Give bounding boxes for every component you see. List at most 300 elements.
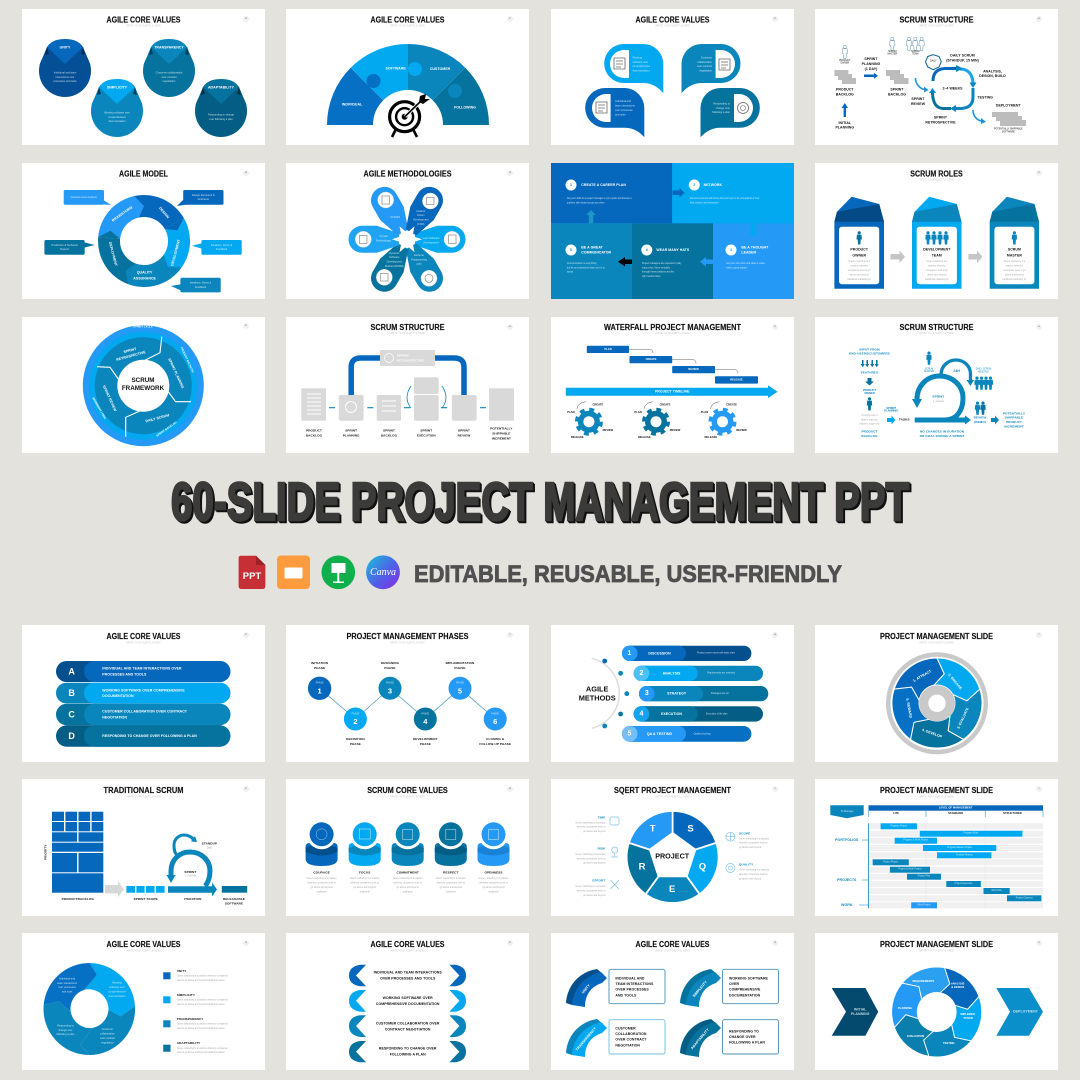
icon: gear cycle 1: REVIEW	[603, 428, 614, 432]
chart: four value drops: interactions over	[55, 75, 75, 79]
chart: four value drops: Individual and team	[54, 70, 76, 74]
diagram: product backlog column: Prioritized list of	[861, 414, 878, 417]
list: bracketed value rows: CONTRACT NEGOTIATION	[385, 1027, 431, 1031]
icon: canva: Canva	[370, 567, 396, 578]
diagram: box details and arrows: PLANNING	[343, 434, 360, 438]
list: A to D stacked pills: RESPONDING TO CHANGE OVER FOLLOWING A PLAN	[102, 734, 197, 738]
labels: SQERT letters and center: R	[639, 862, 646, 872]
labels: cycle stages: TATION	[963, 1016, 973, 1020]
value: courage	[306, 819, 338, 893]
chart: five-stage wheel: DEPLOYMENT	[108, 241, 118, 267]
value: commitment: COMMITMENT	[397, 871, 419, 875]
title: SCRUM STRUCTURE	[370, 322, 445, 332]
arrow: initial planning: INITIAL	[854, 1008, 867, 1012]
chart: four-part donut: following a plan	[56, 1032, 75, 1036]
value: commitment	[392, 819, 424, 893]
panel: project management wheel	[815, 625, 1058, 762]
block: be a thought leader: BE A THOUGHT	[741, 246, 769, 250]
item: unity: OVER PROCESSES	[615, 988, 649, 992]
block: be a great communicator: speak	[567, 272, 574, 274]
tag: to manage	[830, 805, 864, 818]
card: product owner: traditional marketing by	[847, 278, 872, 281]
diagram: product backlog column: END-USERS/CUSTOMERS	[849, 352, 890, 356]
diagram: product backlog column: INPUT FROM	[859, 347, 880, 351]
chart: four value drops: comprehensive	[108, 115, 126, 119]
value: respect: whereby companies seek to	[437, 881, 466, 884]
labels: cycle stages: RETROSPECTIVE	[925, 120, 956, 124]
diagram: box details and arrows: RETROSPECTIVE	[397, 358, 424, 362]
notes: time, risk, effort: whereby companies seek to	[577, 826, 606, 829]
diagram: box details and arrows: PRODUCT	[306, 429, 322, 433]
diagram: box details and arrows: SPRINT	[383, 429, 395, 433]
diagram: box details and arrows: POTENTIALLY	[490, 426, 513, 430]
card: scrum master: practice whereby	[1006, 264, 1024, 268]
list: bracketed value rows: FOLLOWING A PLAN	[390, 1053, 426, 1057]
card: product owner: companies seek to go	[848, 269, 871, 272]
panel: sqert project management: 8	[774, 788, 776, 790]
item: unity	[566, 969, 665, 1007]
callouts: wheel stage notes	[44, 190, 242, 292]
chart: six phase zigzag: IMPLEMENTATION	[446, 661, 475, 665]
panel: agile model: 43	[245, 172, 248, 174]
card: development team	[912, 197, 962, 289]
diagram: box details and arrows: EXECUTION	[417, 434, 436, 438]
panel: traditional scrum: WRITE YOUR SUBTITLE HERE	[126, 796, 161, 798]
legend: four core values: seek to go above and beyond traditional values.	[177, 1027, 226, 1030]
panel: agile core values curved arrows: 28	[774, 942, 777, 944]
title: PROJECT MANAGEMENT SLIDE	[880, 939, 993, 949]
card: scrum master: Green marketing is a	[1004, 260, 1026, 263]
item: adaptability: CHANGE OVER	[729, 1035, 756, 1039]
chart: six-petal flower: Lean Software	[423, 236, 440, 240]
diagram: scrum people and outcome: OR GOAL DURING A SPRINT	[920, 434, 964, 438]
item: transparency: COLLABORATION	[615, 1032, 647, 1036]
list: A to D stacked pills	[56, 661, 230, 747]
labels: cycle stages: PLANNING	[898, 1006, 912, 1010]
chart: gantt rows: Project Execution	[955, 882, 973, 885]
card: development team: companies seek to go	[926, 269, 949, 272]
chart: four value drops	[39, 39, 247, 137]
list: bracketed value rows: COMPREHENSIVE DOCUMENTATION	[376, 1002, 440, 1006]
list: A to D stacked pills: CUSTOMER COLLABORATION OVER CONTRACT	[102, 710, 188, 714]
bubble: individual and team	[585, 88, 644, 137]
list: five method pills: STRATEGY	[667, 692, 687, 696]
chart: waterfall steps	[587, 346, 758, 384]
labels: portfolio levels: PROJECTS	[837, 878, 857, 882]
value: focus: whereby companies seek to	[350, 881, 380, 884]
chart: five-stage wheel: QUALITY	[137, 271, 153, 275]
value: focus: traditional	[360, 890, 370, 893]
icon: gear cycle 2: REVIEW	[670, 428, 681, 432]
item: simplicity	[680, 969, 778, 1007]
diagram: backlog stacks and labels: PRODUCT	[836, 87, 854, 91]
diagram: sprint spiral: 1–4 weeks	[933, 401, 945, 403]
title: AGILE CORE VALUES	[636, 14, 710, 24]
diagram: product backlog column: PLANNING	[884, 408, 898, 412]
bubble: working software: documentation	[632, 68, 650, 72]
block: be a great communicator: COMMUNICATOR	[581, 250, 612, 254]
notes: scope, quality: whereby companies seek to	[739, 873, 768, 876]
diagram: scrum people and outcome: NO CHANGES IN DURATION	[920, 430, 965, 434]
list: bracketed value rows: OVER PROCESSES AND TOOLS	[380, 976, 436, 980]
chart: gantt rows: Work Project	[917, 903, 931, 906]
bubble: individual and team: team interactions	[615, 104, 635, 108]
chart: gantt rows: Program Work	[964, 832, 979, 835]
panel: waterfall project management: WRITE YOUR SUBTITLE HERE	[655, 332, 690, 335]
notes: scope, quality: whereby companies seek to	[739, 842, 768, 845]
list: five method pills	[622, 646, 768, 742]
diagram: sprint flow: RELEASABLE	[223, 897, 245, 901]
chart: concentric framework wheel: INCREMENT / PBIS	[91, 396, 107, 420]
labels: portfolio levels: PORTFOLIOS	[835, 838, 859, 842]
block: wear many hats: Project managers are expected to play	[642, 262, 682, 265]
title: SQERT PROJECT MANAGEMENT	[614, 785, 732, 795]
legend: four core values: TRANSPARENCY	[177, 1017, 204, 1021]
labels: cycle stages: REQUIREMENTS	[912, 979, 934, 983]
bubble: customer collaboration	[682, 44, 740, 93]
legend: four core values: Green marketing is a practice whereby companies	[177, 999, 229, 1002]
chart: gantt rows: Program & Work Project	[903, 839, 929, 842]
labels: cycle stages: ANALYSIS,	[983, 69, 1002, 73]
panel: project management gantt: 5	[1038, 788, 1040, 790]
block: create a career plan: 1	[570, 183, 572, 187]
diagram: backlog stacks and labels: PLANNING	[835, 126, 854, 130]
panel: agile core values rows: 21	[245, 634, 248, 636]
chart: six phase zigzag: 1	[318, 686, 322, 696]
value: commitment: Green marketing is a practice	[393, 877, 423, 880]
label: priority axis: PRIORITY	[44, 844, 48, 860]
block: be a great communicator: 5	[570, 248, 572, 252]
diagram: box details and arrows: INCREMENT	[492, 436, 511, 440]
chart: five-step cycle wheel	[886, 652, 988, 754]
chart: six-petal flower: (XP)	[416, 262, 422, 266]
panel: agile core values speech bubbles: 31	[774, 18, 777, 20]
card: development team: traditional marketing by	[925, 278, 950, 281]
diagram: scrum people and outcome: INCREMENT	[1004, 424, 1024, 428]
item: adaptability	[680, 1019, 778, 1057]
icon: powerpoint file: PPT	[243, 571, 261, 582]
diagram: backlog stacks and labels: REVIEW	[911, 102, 926, 106]
chart: four-part donut: Working	[112, 980, 122, 984]
value: courage: COURAGE	[313, 871, 330, 875]
value: commitment: whereby companies seek to	[393, 881, 423, 884]
chart: concentric framework wheel: SPRINT REVIEW	[102, 385, 118, 413]
diagram: backlog stacks and labels: INITIAL	[838, 121, 852, 125]
value: courage: go above and beyond	[311, 887, 333, 889]
value: courage: whereby companies seek to	[307, 881, 337, 884]
icon: gear cycle 1: PLAN	[567, 410, 575, 414]
item: simplicity: WORKING SOFTWARE	[729, 976, 769, 980]
bubble: working software	[604, 44, 663, 93]
legend: four core values: SIMPLICITY	[177, 993, 196, 997]
diagram: product backlog column: features, bugs to fix	[859, 423, 880, 426]
diagram: sprint spiral: 24H	[953, 369, 960, 373]
legend: four core values	[163, 969, 229, 1054]
chart: six-petal flower: Development	[423, 240, 439, 244]
title: AGILE CORE VALUES	[370, 14, 445, 24]
labels: cycle stages: DAILY	[930, 60, 937, 63]
diagram: scrum people and outcome: MASTER	[924, 370, 934, 373]
diagram: backlog stacks and labels: SPRINT	[890, 87, 904, 91]
notes: time, risk, effort: go above and beyond	[583, 895, 606, 897]
arrow: initial planning	[832, 988, 878, 1036]
diagram: backlog stacks and labels: SPRINT	[864, 57, 878, 61]
notes: time, risk, effort: EFFORT	[592, 879, 605, 883]
icon: gear cycle 2	[634, 402, 681, 439]
block: be a great communicator: Communication is everything	[567, 262, 597, 265]
diagram: sprint flow	[62, 835, 247, 906]
icon: keynote	[322, 556, 355, 589]
chart: gantt rows	[868, 823, 1043, 908]
value: focus: go above and beyond	[354, 887, 376, 889]
icon: gear cycle 3: REVIEW	[736, 428, 747, 432]
panel: project management cycle: 11	[1038, 942, 1041, 944]
list: five method pills: Product owner meets with sales team	[697, 652, 735, 655]
chart: six phase zigzag: 2	[353, 717, 357, 726]
value: focus: FOCUS	[359, 871, 370, 875]
labels: cycle stages: TESTING	[943, 1041, 955, 1045]
chart: waterfall steps: RELEASE	[730, 378, 743, 382]
panel: agile methodologies	[286, 163, 529, 299]
chart: six-petal flower: Feature	[416, 209, 426, 213]
chart: six phase zigzag: 5	[458, 686, 462, 696]
card: scrum master: companies seek to go	[1003, 269, 1026, 272]
legend: four core values: seek to go above and beyond traditional values.	[177, 979, 226, 982]
diagram: box details and arrows: SPRINT	[345, 429, 357, 433]
diagram: box details and arrows: SPRINT	[397, 354, 409, 358]
chart: six phase zigzag: PHASE	[316, 682, 324, 685]
notes: time, risk, effort: Green marketing is a practice	[575, 821, 606, 824]
panel: agile core values donut	[22, 933, 265, 1070]
chart: four value drops: over following a plan	[209, 117, 233, 121]
diagram: product backlog column: PRODUCT	[863, 388, 876, 392]
title: SCRUM CORE VALUES	[367, 785, 448, 795]
panel: agile core values chevrons: 31	[509, 942, 512, 944]
diagram: product backlog column: FEATURES	[861, 370, 878, 374]
chart: four value drops: ADAPTABILITY	[208, 86, 235, 90]
chart: puzzle semicircle: CUSTOMER	[430, 67, 451, 71]
chart: four-part donut	[43, 963, 135, 1055]
icon: gear cycle 2: RELEASE	[638, 435, 651, 439]
list: A to D stacked pills: C	[68, 710, 75, 720]
item: transparency: NEGOTIATION	[615, 1043, 640, 1047]
panel: project management wheel: WRITE YOUR SUBTITLE HERE	[919, 642, 954, 644]
notes: scope, quality: go above and beyond	[739, 847, 762, 849]
list: five method pills: DISCUSSION	[648, 651, 671, 655]
labels: cycle stages: (STANDUP, 15 MIN)	[946, 58, 979, 62]
list: five method pills: Requirements are reviewed	[707, 672, 736, 675]
chart: concentric framework wheel: FRAMEWORK	[122, 385, 165, 392]
chart: four-part donut: and tools	[62, 990, 73, 994]
chart: gantt rows: Project & Work Project	[898, 868, 922, 871]
diagram: sprint flow: SPRINT SCOPE	[134, 897, 158, 901]
diagram: backlog stacks and labels: PLANNING	[862, 62, 881, 66]
chart: six phase zigzag: PHASE	[352, 712, 360, 715]
chart: waterfall steps: PLAN	[604, 347, 612, 351]
block: network: Surround yourself with those who push you to be exceptional in their	[690, 197, 759, 200]
chart: concentric framework wheel: SCRUM	[131, 377, 155, 384]
chart: six-petal flower	[348, 182, 466, 297]
diagram: box details and arrows: BACKLOG	[306, 434, 323, 438]
diagram: sprint spiral: SPRINT	[932, 394, 944, 398]
list: five method pills: Quality checking	[694, 732, 711, 735]
block: wear many hats: WEAR MANY HATS	[656, 248, 690, 252]
list: five method pills: 3	[645, 690, 649, 697]
list: five method pills: Execution of the plan	[706, 712, 728, 715]
block: wear many hats: 4	[646, 248, 648, 252]
diagram: sprint flow: STANDUP	[202, 842, 217, 846]
panel: scrum framework: 52	[245, 325, 248, 327]
chart: five-stage wheel: BRAINSTORM	[111, 205, 133, 223]
bubble: responding to change: Responding to	[713, 102, 731, 106]
list: five method pills: 4	[640, 710, 644, 718]
value: commitment: traditional	[403, 890, 413, 893]
chart: six phase zigzag: DESIGNING	[381, 661, 400, 665]
notes: time, risk, effort: go above and beyond	[583, 831, 606, 833]
block: create a career plan: problem with ideas that get you there	[567, 201, 605, 204]
labels: cycle stages: 2–4 WEEKS	[942, 86, 963, 90]
list: A to D stacked pills: B	[68, 688, 75, 698]
item: adaptability: RESPONDING TO	[729, 1029, 759, 1033]
chart: four-part donut: collaboration	[100, 1032, 115, 1036]
list: five method pills: Strategies are set	[711, 692, 729, 695]
chart: five-step cycle wheel: 1. ATTRACT	[912, 669, 933, 683]
diagram: backlog stacks and labels: BACKLOG	[888, 92, 906, 96]
chart: five-step cycle wheel: 5. REWARD	[905, 698, 913, 719]
block: create a career plan: CREATE A CAREER PLAN	[581, 183, 626, 187]
block: network	[672, 163, 794, 223]
diagram: sprint spiral	[912, 360, 974, 424]
panel: scrum structure cycle	[815, 9, 1058, 145]
diagram: product backlog column: OWNER	[864, 391, 875, 395]
card: development team: practice whereby	[928, 264, 946, 268]
title: SCRUM ROLES	[910, 168, 963, 178]
diagram: sprint flow: Daily	[207, 847, 213, 849]
item: simplicity: OVER	[729, 982, 740, 986]
diagram: scrum people and outcome: POTENTIALLY	[1003, 411, 1026, 415]
callouts: wheel stage notes: Design document &	[192, 193, 215, 197]
value: respect	[435, 819, 467, 893]
diagram: box details and arrows: SPRINT	[420, 429, 432, 433]
diagram: product backlog column	[849, 347, 910, 438]
chart: gantt rows: Project Project	[883, 860, 899, 863]
chart: four value drops: SIMPLICITY	[107, 86, 128, 90]
bubble: customer collaboration: over contract	[697, 64, 712, 68]
panel: scrum core values	[286, 779, 529, 916]
item: unity: UNITY	[581, 983, 591, 994]
legend: four core values: ADAPTABILITY	[177, 1041, 201, 1045]
panel: agile core values chevrons: WRITE YOUR SUBTITLE HERE	[390, 950, 425, 952]
chart: concentric framework wheel: SPRINT PLANNING	[167, 358, 185, 389]
card: product owner	[834, 197, 884, 289]
panel: scrum roles: WRITE YOUR SUBTITLE HERE	[919, 178, 954, 182]
item: simplicity: COMPREHENSIVE	[729, 988, 761, 992]
notes: time, risk, effort: TIME	[598, 815, 605, 819]
panel: sqert project management: WRITE YOUR SUBTITLE HERE	[655, 796, 690, 798]
list: five method pills: 1	[628, 650, 632, 657]
chart: six-petal flower: Dynamic	[389, 251, 400, 255]
labels: portfolio levels	[835, 838, 868, 907]
notes: scope, quality: Green marketing is a practice	[739, 869, 770, 872]
panel: agile model: WRITE YOUR SUBTITLE HERE	[126, 178, 161, 182]
block: be a thought leader	[726, 244, 769, 269]
labels: SQERT letters and center: Q	[699, 862, 706, 872]
chart: gantt rows: Program Project	[890, 824, 907, 827]
panel: scrum core values: 43	[509, 788, 512, 790]
icon: gear cycle 3: PLAN	[701, 410, 708, 414]
bubble: customer collaboration: collaboration	[697, 60, 713, 64]
title: PROJECT MANAGEMENT PHASES	[346, 631, 469, 641]
diagram: box details and arrows: REVIEW	[458, 434, 470, 438]
chart: six phase zigzag: PHASE	[384, 666, 396, 670]
panel: agile core values speech bubbles	[551, 9, 794, 145]
diagram: scrum people and outcome: DAILY SCRUM	[976, 367, 991, 370]
icon: canva	[366, 555, 400, 589]
chart: four-part donut: documentation	[108, 994, 126, 998]
block: wear many hats: many roles. Move smoothly	[642, 266, 671, 269]
chart: six phase zigzag: PHASE	[420, 742, 431, 746]
labels: cycle stages	[925, 54, 1023, 133]
panel: agile methods pills: 38	[774, 634, 777, 636]
callouts: wheel stage notes: Production & Technical	[51, 243, 78, 247]
legend: four core values: Green marketing is a practice whereby companies	[177, 1023, 229, 1026]
notes: time, risk, effort: Green marketing is a practice	[575, 853, 606, 856]
legend: four core values: UNITY	[177, 969, 187, 973]
panel: waterfall project management: 41	[774, 326, 777, 328]
title: AGILE CORE VALUES	[106, 631, 181, 641]
diagram: backlog stacks and labels: MASTER	[888, 53, 897, 56]
block: be a thought leader: Get your own voice and share it online	[726, 262, 766, 265]
bubble: customer collaboration: Customer	[701, 56, 712, 60]
panel: agile core values puzzle arch: WRITE YOUR SUBTITLE HERE	[390, 24, 425, 28]
chart: four value drops: Working software over	[104, 110, 130, 114]
list: bracketed value rows: INDIVIDUAL AND TEAM INTERACTIONS	[374, 971, 442, 975]
value: focus	[349, 819, 381, 893]
icon: gear cycle 2: CREATE	[660, 402, 671, 406]
panel: agile core values rows: WRITE YOUR SUBTITLE HERE	[126, 642, 161, 644]
chart: six-petal flower: Driven	[417, 213, 425, 217]
card: development team: DEVELOPMENT	[923, 248, 951, 252]
diagram: backlog stacks and labels: (1 DAY)	[865, 67, 877, 71]
arrow: project timeline: PROJECT TIMELINE	[655, 390, 690, 394]
icon: gear cycle 1: RELEASE	[571, 435, 584, 439]
diagram: scrum people and outcome: MEETING	[978, 371, 989, 373]
notes: scope, quality	[726, 831, 770, 880]
icon: powerpoint file	[239, 556, 265, 589]
item: simplicity: DOCUMENTATION	[729, 993, 761, 997]
value: respect: Green marketing is a practice	[436, 877, 467, 880]
panel: scrum structure sprint: WRITE YOUR SUBTITLE HERE	[919, 332, 954, 335]
diagram: box details and arrows: SHIPPABLE	[492, 431, 511, 435]
chart: five-step cycle wheel: 2. ENGAGE	[947, 673, 963, 691]
list: A to D stacked pills: D	[68, 731, 75, 741]
panel: waterfall project management	[551, 317, 794, 453]
card: product owner: PRODUCT	[850, 248, 869, 252]
block: be a great communicator: BE A GREAT	[581, 246, 604, 250]
labels: portfolio levels: WORK	[841, 903, 853, 907]
item: transparency: OVER CONTRACT	[615, 1038, 647, 1042]
title: WATERFALL PROJECT MANAGEMENT	[604, 322, 742, 332]
chart: six phase zigzag	[308, 661, 511, 746]
item: unity: AND TOOLS	[615, 993, 637, 997]
chart: puzzle semicircle: INDIVIDUAL	[342, 102, 363, 106]
chart: four value drops: Customer collaboration	[156, 70, 183, 74]
bubble: working software: Working	[632, 56, 643, 60]
chart: six-petal flower: Software	[389, 255, 400, 259]
chart: four-part donut: Responding to	[57, 1024, 74, 1028]
chart: puzzle semicircle: FOLLOWING	[454, 106, 476, 110]
table header: LITE	[893, 811, 899, 815]
